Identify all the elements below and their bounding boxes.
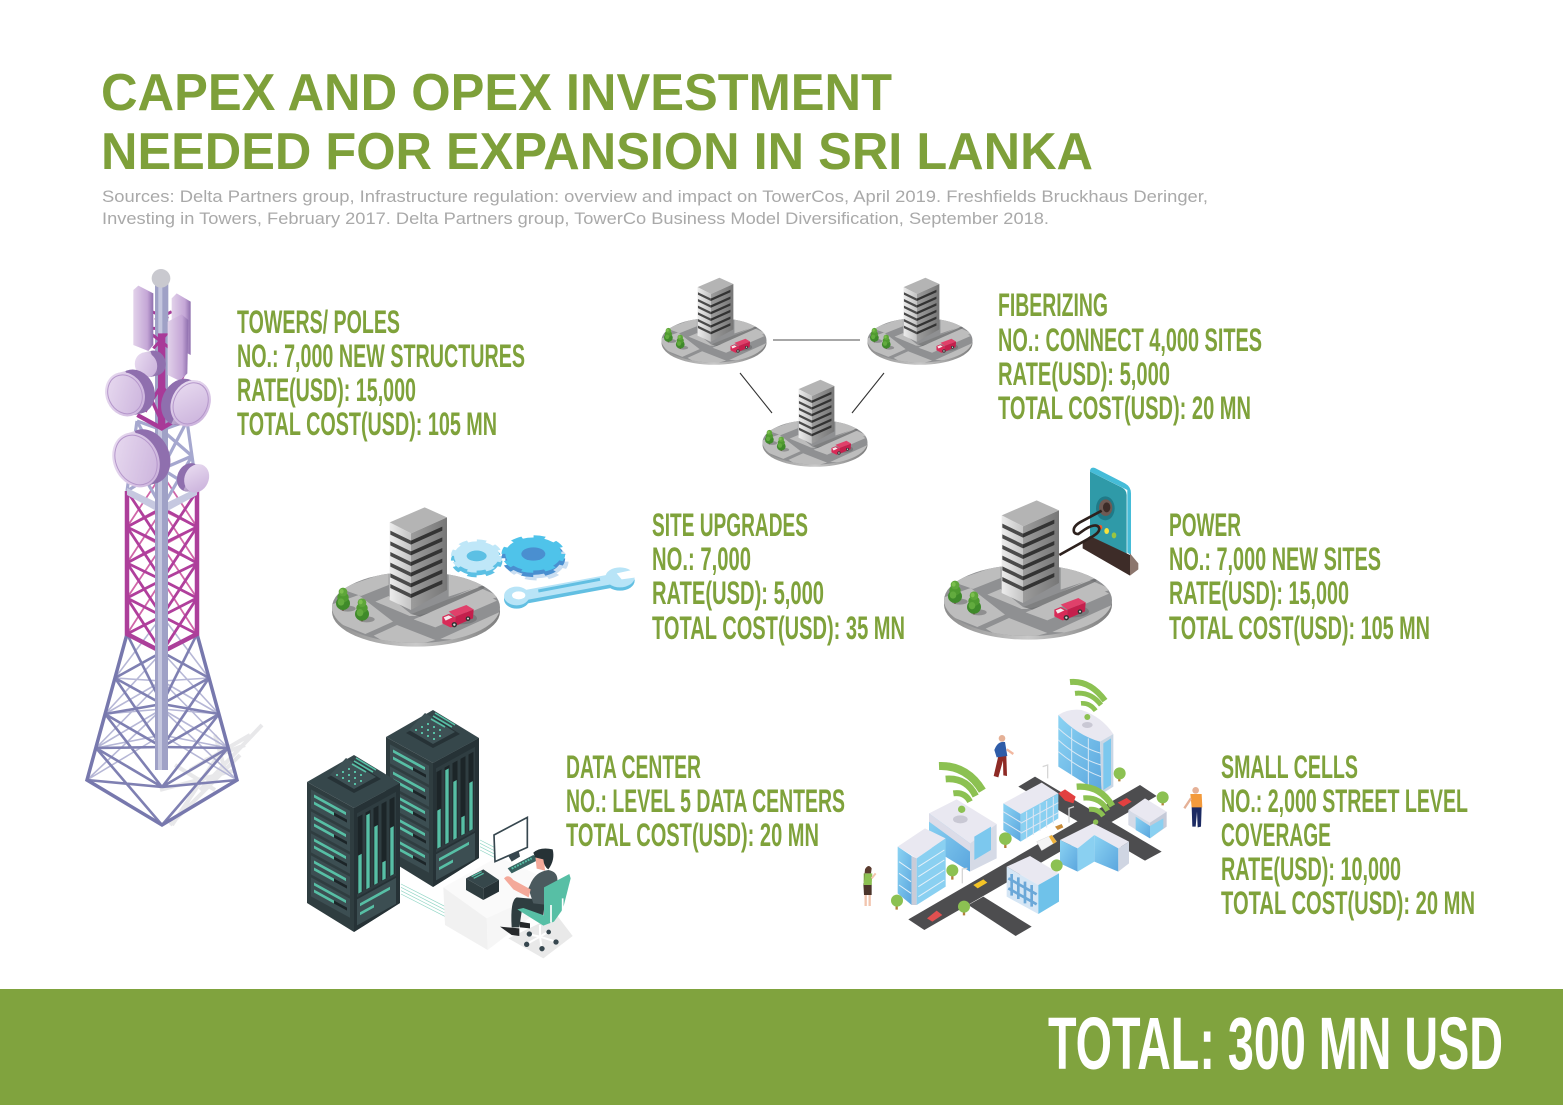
text: towers / poles: TOTAL COST(USD): 105 MN (237, 406, 497, 442)
sources text (102, 187, 1208, 228)
text: fiberizing (998, 287, 1262, 426)
text: small cells: SMALL CELLS (1221, 749, 1358, 785)
antenna dishes (98, 347, 218, 497)
trees (891, 767, 1169, 915)
person (500, 849, 557, 936)
text: fiberizing: NO.: CONNECT 4,000 SITES (998, 322, 1262, 358)
charger panel (1083, 468, 1138, 576)
people (863, 735, 1202, 906)
total banner (0, 989, 1563, 1105)
title: NEEDED FOR EXPANSION IN SRI LANKA (101, 123, 1093, 181)
text: small cells: RATE(USD): 10,000 (1221, 851, 1401, 887)
text: power (1169, 507, 1430, 646)
chair (517, 874, 571, 926)
link lines (740, 340, 884, 413)
wifi signals (939, 682, 1112, 816)
text: fiberizing: FIBERIZING (998, 287, 1108, 323)
icon: small cells city (863, 682, 1202, 936)
text: data center (566, 749, 845, 853)
vehicles (927, 789, 1132, 922)
text: site upgrades (652, 507, 905, 646)
text: fiberizing: TOTAL COST(USD): 20 MN (998, 390, 1251, 426)
printer box (466, 869, 499, 900)
sources text: Investing in Towers, February 2017. Delta Partners group, TowerCo Business Model Diversification, September 2018. (102, 209, 1049, 228)
floor mat (508, 915, 573, 958)
text: fiberizing: RATE(USD): 5,000 (998, 356, 1170, 392)
buildings (898, 710, 1167, 914)
pole top ball (152, 269, 170, 288)
monitor (494, 817, 539, 873)
text: power: NO.: 7,000 NEW SITES (1169, 541, 1381, 577)
sources text: Sources: Delta Partners group, Infrastructure regulation: overview and impact on TowerCos, April 2019. Freshfields Bruckhaus Deringer, (102, 187, 1208, 206)
icon: data center (307, 710, 573, 958)
title: CAPEX AND OPEX INVESTMENT (101, 64, 892, 122)
chair base (524, 925, 559, 951)
text: site upgrades: RATE(USD): 5,000 (652, 575, 824, 611)
text: site upgrades: TOTAL COST(USD): 35 MN (652, 610, 905, 646)
text: towers / poles: NO.: 7,000 NEW STRUCTURES (237, 338, 525, 374)
icon: power (942, 468, 1138, 640)
street lamps (962, 765, 1074, 883)
text: towers / poles: RATE(USD): 15,000 (237, 372, 416, 408)
text: towers / poles: TOWERS/ POLES (237, 304, 400, 340)
text: data center: NO.: LEVEL 5 DATA CENTERS (566, 783, 845, 819)
text: small cells (1221, 749, 1475, 921)
text: data center: DATA CENTER (566, 749, 701, 785)
gears (453, 537, 566, 579)
text: small cells: COVERAGE (1221, 817, 1331, 853)
text: site upgrades: SITE UPGRADES (652, 507, 808, 543)
upper magenta lattice (137, 312, 187, 428)
icon: fiberizing network (660, 278, 973, 467)
text: power: RATE(USD): 15,000 (1169, 575, 1349, 611)
icon: telecom tower (87, 269, 262, 825)
antenna panels (133, 283, 191, 381)
text: towers / poles (237, 304, 525, 442)
cable (1059, 511, 1102, 555)
text: site upgrades: NO.: 7,000 (652, 541, 751, 577)
text: data center: TOTAL COST(USD): 20 MN (566, 817, 819, 853)
roads (908, 777, 1162, 936)
title (101, 64, 1093, 181)
wrench (504, 567, 636, 609)
icon: site upgrades (330, 507, 636, 647)
text: power: POWER (1169, 507, 1241, 543)
